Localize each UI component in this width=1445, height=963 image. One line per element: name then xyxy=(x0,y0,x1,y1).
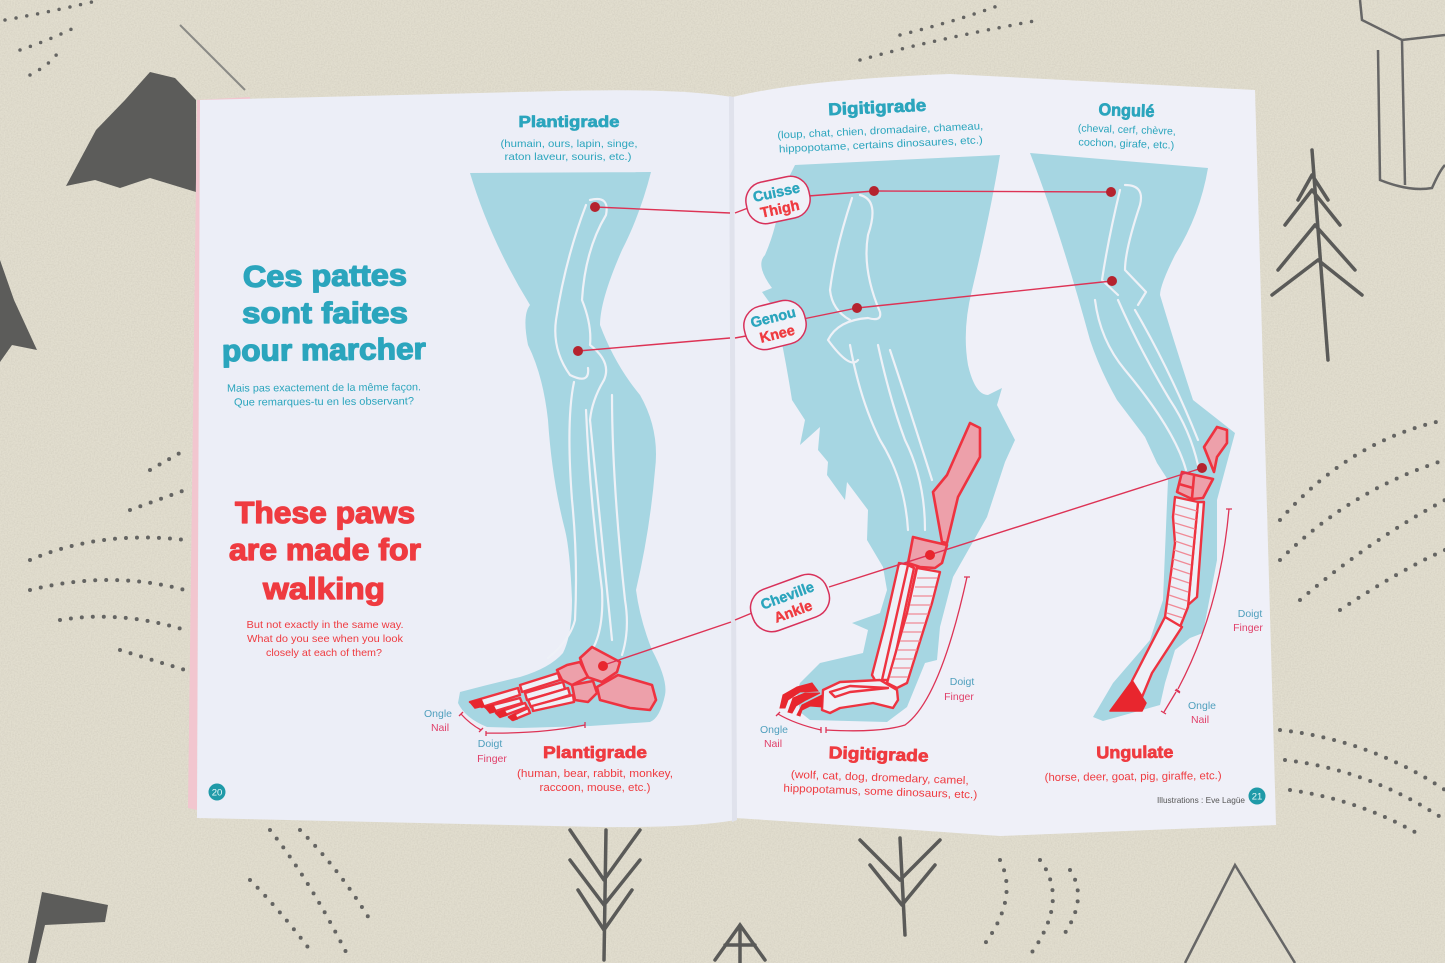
leg silhouette xyxy=(761,155,1015,722)
measure: ungulate nail and finger: Finger xyxy=(1233,622,1263,634)
plantigrade English label: raccoon, mouse, etc.) xyxy=(540,782,650,794)
measure: digitigrade nail and finger: Ongle xyxy=(760,724,788,736)
digitigrade French label: (loup, chat, chien, dromadaire, chameau, xyxy=(777,120,983,142)
ungulate English label: (horse, deer, goat, pig, giraffe, etc.) xyxy=(1045,770,1222,784)
measure: digitigrade nail and finger: Nail xyxy=(764,738,782,750)
measure: plantigrade nail and finger xyxy=(424,708,585,765)
label: knee xyxy=(740,296,810,354)
leg silhouette xyxy=(458,172,665,728)
text: English subtitle: closely at each of them? xyxy=(266,647,382,659)
leg bones xyxy=(828,195,932,530)
label: ankle: Ankle xyxy=(772,598,815,627)
leg silhouette xyxy=(1030,153,1235,721)
text: English subtitle: What do you see when you look xyxy=(247,633,404,645)
toe bones xyxy=(780,680,898,716)
plantigrade French label xyxy=(500,114,638,163)
label: thigh: Cuisse xyxy=(752,180,801,206)
heading: French title: Ces pattes xyxy=(243,259,407,294)
measure: ungulate nail and finger: Nail xyxy=(1191,714,1209,726)
measure: ungulate nail and finger: Ongle xyxy=(1188,700,1216,712)
digitigrade French label: Digitigrade xyxy=(828,96,927,119)
measure: digitigrade nail and finger xyxy=(760,577,974,750)
metatarsal xyxy=(1165,497,1204,627)
ongulé French label xyxy=(1077,99,1177,152)
panel: right page xyxy=(733,74,1276,836)
label: knee: Genou xyxy=(749,305,798,332)
spine shading xyxy=(729,96,737,822)
page number 20 xyxy=(208,784,226,800)
ongulé French label: Ongulé xyxy=(1098,100,1155,121)
calcaneus bone xyxy=(1204,427,1227,472)
digitigrade French label xyxy=(776,93,984,156)
page number 21 and credit: 21 xyxy=(1252,792,1262,802)
connector: knee xyxy=(573,276,1117,356)
hoof xyxy=(1110,681,1146,711)
text: English subtitle xyxy=(246,619,404,659)
heading: English title xyxy=(229,495,421,606)
leg bones xyxy=(1095,185,1198,470)
illustration: digitigrade leg xyxy=(761,155,1015,722)
plantigrade French label: Plantigrade xyxy=(518,114,620,131)
ungulate English label: Ungulate xyxy=(1096,743,1173,762)
heading: English title: walking xyxy=(262,571,385,606)
page edge: pink cover xyxy=(188,97,250,810)
measure: ungulate nail and finger xyxy=(1161,509,1263,726)
heading: French title: sont faites xyxy=(242,297,408,330)
digitigrade French label: hippopotame, certains dinosaures, etc.) xyxy=(779,134,983,156)
connector: thigh xyxy=(590,186,1116,213)
illustration: plantigrade leg xyxy=(458,172,665,728)
page number 20: 20 xyxy=(212,788,222,798)
digitigrade English label: Digitigrade xyxy=(828,743,929,766)
label: ankle xyxy=(745,569,835,637)
page number 21 and credit xyxy=(1157,788,1266,805)
plantigrade French label: (humain, ours, lapin, singe, xyxy=(500,138,638,150)
plantigrade English label: Plantigrade xyxy=(543,743,647,762)
text: French subtitle: Que remarques-tu en les observant? xyxy=(234,395,414,409)
leg bones xyxy=(548,199,627,658)
ongulé French label: cochon, girafe, etc.) xyxy=(1078,136,1175,152)
measure: plantigrade nail and finger: Finger xyxy=(477,753,507,765)
plantigrade French label: raton laveur, souris, etc.) xyxy=(504,151,632,163)
plantigrade English label xyxy=(517,743,673,794)
measure: ungulate nail and finger: Doigt xyxy=(1238,608,1262,620)
digitigrade English label xyxy=(783,742,979,801)
digitigrade English label: hippopotamus, some dinosaurs, etc.) xyxy=(783,783,977,801)
ongulé French label: (cheval, cerf, chèvre, xyxy=(1078,122,1176,138)
metatarsal bones xyxy=(872,563,940,688)
text: English subtitle: But not exactly in the same way. xyxy=(246,619,404,631)
measure: plantigrade nail and finger: Nail xyxy=(431,722,449,734)
calcaneus bone xyxy=(933,423,980,543)
measure: plantigrade nail and finger: Ongle xyxy=(424,708,452,720)
label: knee: Knee xyxy=(758,323,797,347)
heading: English title: are made for xyxy=(229,532,421,567)
connector: ankle xyxy=(598,463,1207,671)
ankle bones xyxy=(908,537,947,568)
panel: left page xyxy=(197,90,736,827)
plantigrade English label: (human, bear, rabbit, monkey, xyxy=(517,768,673,780)
heading: French title xyxy=(222,259,426,368)
measure: digitigrade nail and finger: Finger xyxy=(944,691,974,703)
illustration: ungulate leg xyxy=(1030,153,1235,721)
measure: digitigrade nail and finger: Doigt xyxy=(950,676,974,688)
heading: French title: pour marcher xyxy=(222,333,426,368)
label: ankle: Cheville xyxy=(759,579,816,613)
heading: English title: These paws xyxy=(235,495,415,530)
measure: plantigrade nail and finger: Doigt xyxy=(478,738,502,750)
text: French subtitle xyxy=(227,381,421,409)
ankle bones xyxy=(1177,472,1213,499)
label: thigh xyxy=(742,173,814,227)
label: thigh: Thigh xyxy=(759,198,801,222)
toe bone xyxy=(1132,617,1182,697)
foot bones xyxy=(470,647,656,720)
page number 21 and credit: Illustrations : Eve Lagüe xyxy=(1157,795,1245,805)
ungulate English label xyxy=(1044,742,1222,784)
text: French subtitle: Mais pas exactement de la même façon. xyxy=(227,381,421,395)
digitigrade English label: (wolf, cat, dog, dromedary, camel, xyxy=(791,769,969,787)
